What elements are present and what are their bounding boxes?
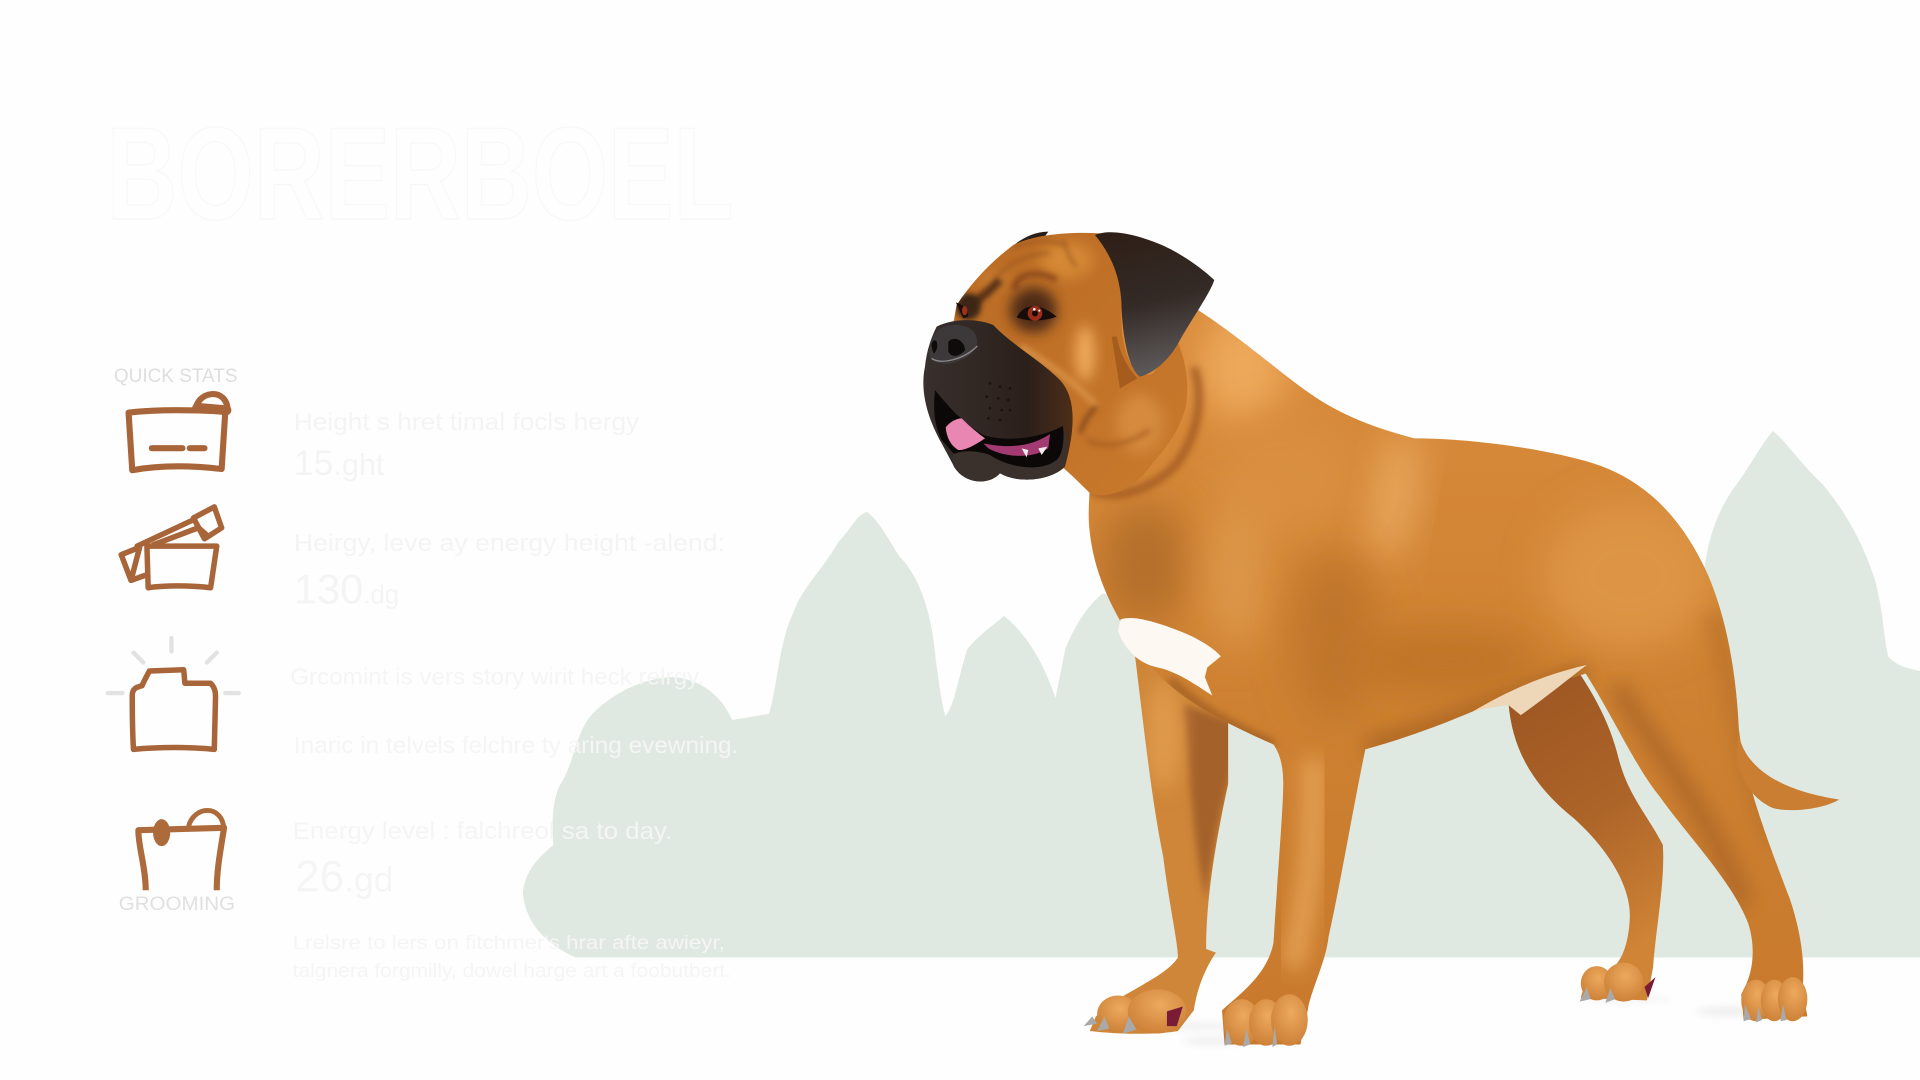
text block: height: Height s hret timal focls hergy (294, 409, 640, 436)
mouth interior (934, 390, 1064, 470)
text block: energy: 26.gd (295, 852, 393, 901)
illustration: boerboel dog (923, 232, 1839, 1047)
grooming label: GROOMING (119, 894, 235, 915)
icon: energy stat (108, 638, 239, 749)
quick stats heading: QUICK STATS (114, 366, 238, 387)
text block: energy: Energy level : falchreol sa to day. (293, 818, 672, 845)
ear (1095, 232, 1214, 377)
ground shadows (1151, 997, 1757, 1044)
head (923, 232, 1214, 495)
tree silhouette backdrop (523, 431, 1920, 958)
eye mask (1010, 287, 1057, 333)
cheek fold highlight (1020, 347, 1097, 407)
teeth (1022, 447, 1047, 457)
title: BORERBOEL (107, 100, 733, 248)
text block: height: 15.ght (294, 443, 385, 483)
face (953, 233, 1187, 495)
far front leg (1084, 637, 1237, 1034)
text block: temperament: Inaric in telvels felchre ty aring evewning. (294, 732, 738, 758)
belly cream patch (1473, 665, 1587, 715)
icon: grooming (138, 810, 224, 890)
near front paw (1223, 994, 1308, 1047)
text block: footer note: talgnera forgmilly, dowel harge art a foobutbert. (293, 960, 731, 982)
whisker dots (985, 382, 1011, 421)
text block: weight: 130.dg (294, 566, 399, 613)
chest white patch (1118, 618, 1221, 696)
body and near legs (1065, 300, 1839, 1047)
text block: weight (294, 530, 725, 613)
near hind paw (1741, 977, 1807, 1022)
tail (1736, 735, 1839, 810)
text block: height (294, 409, 640, 483)
tongue (946, 418, 985, 450)
icon: weight stat (121, 507, 222, 588)
near eye (1017, 306, 1057, 321)
text block: temperament (290, 663, 738, 758)
text block: energy (293, 818, 672, 901)
far eye (956, 303, 968, 318)
text block: footer note (293, 932, 731, 982)
muzzle (923, 320, 1073, 482)
lower lip (952, 427, 1067, 482)
text block: weight: Heirgy, leve ay energy height -alend: (294, 530, 725, 557)
infographic canvas (106, 232, 1920, 1047)
text block: temperament: Grcomint is vers story wirit heck relrgy. (290, 663, 704, 689)
ear shade (1112, 337, 1137, 388)
top of head rim (1002, 232, 1048, 260)
icon: height stat (129, 394, 228, 470)
text block: footer note: Lrelsre to lers on fitchmer's hrar afte awieyr, (293, 932, 725, 954)
far hind leg (1509, 673, 1663, 1003)
nose (929, 325, 977, 364)
